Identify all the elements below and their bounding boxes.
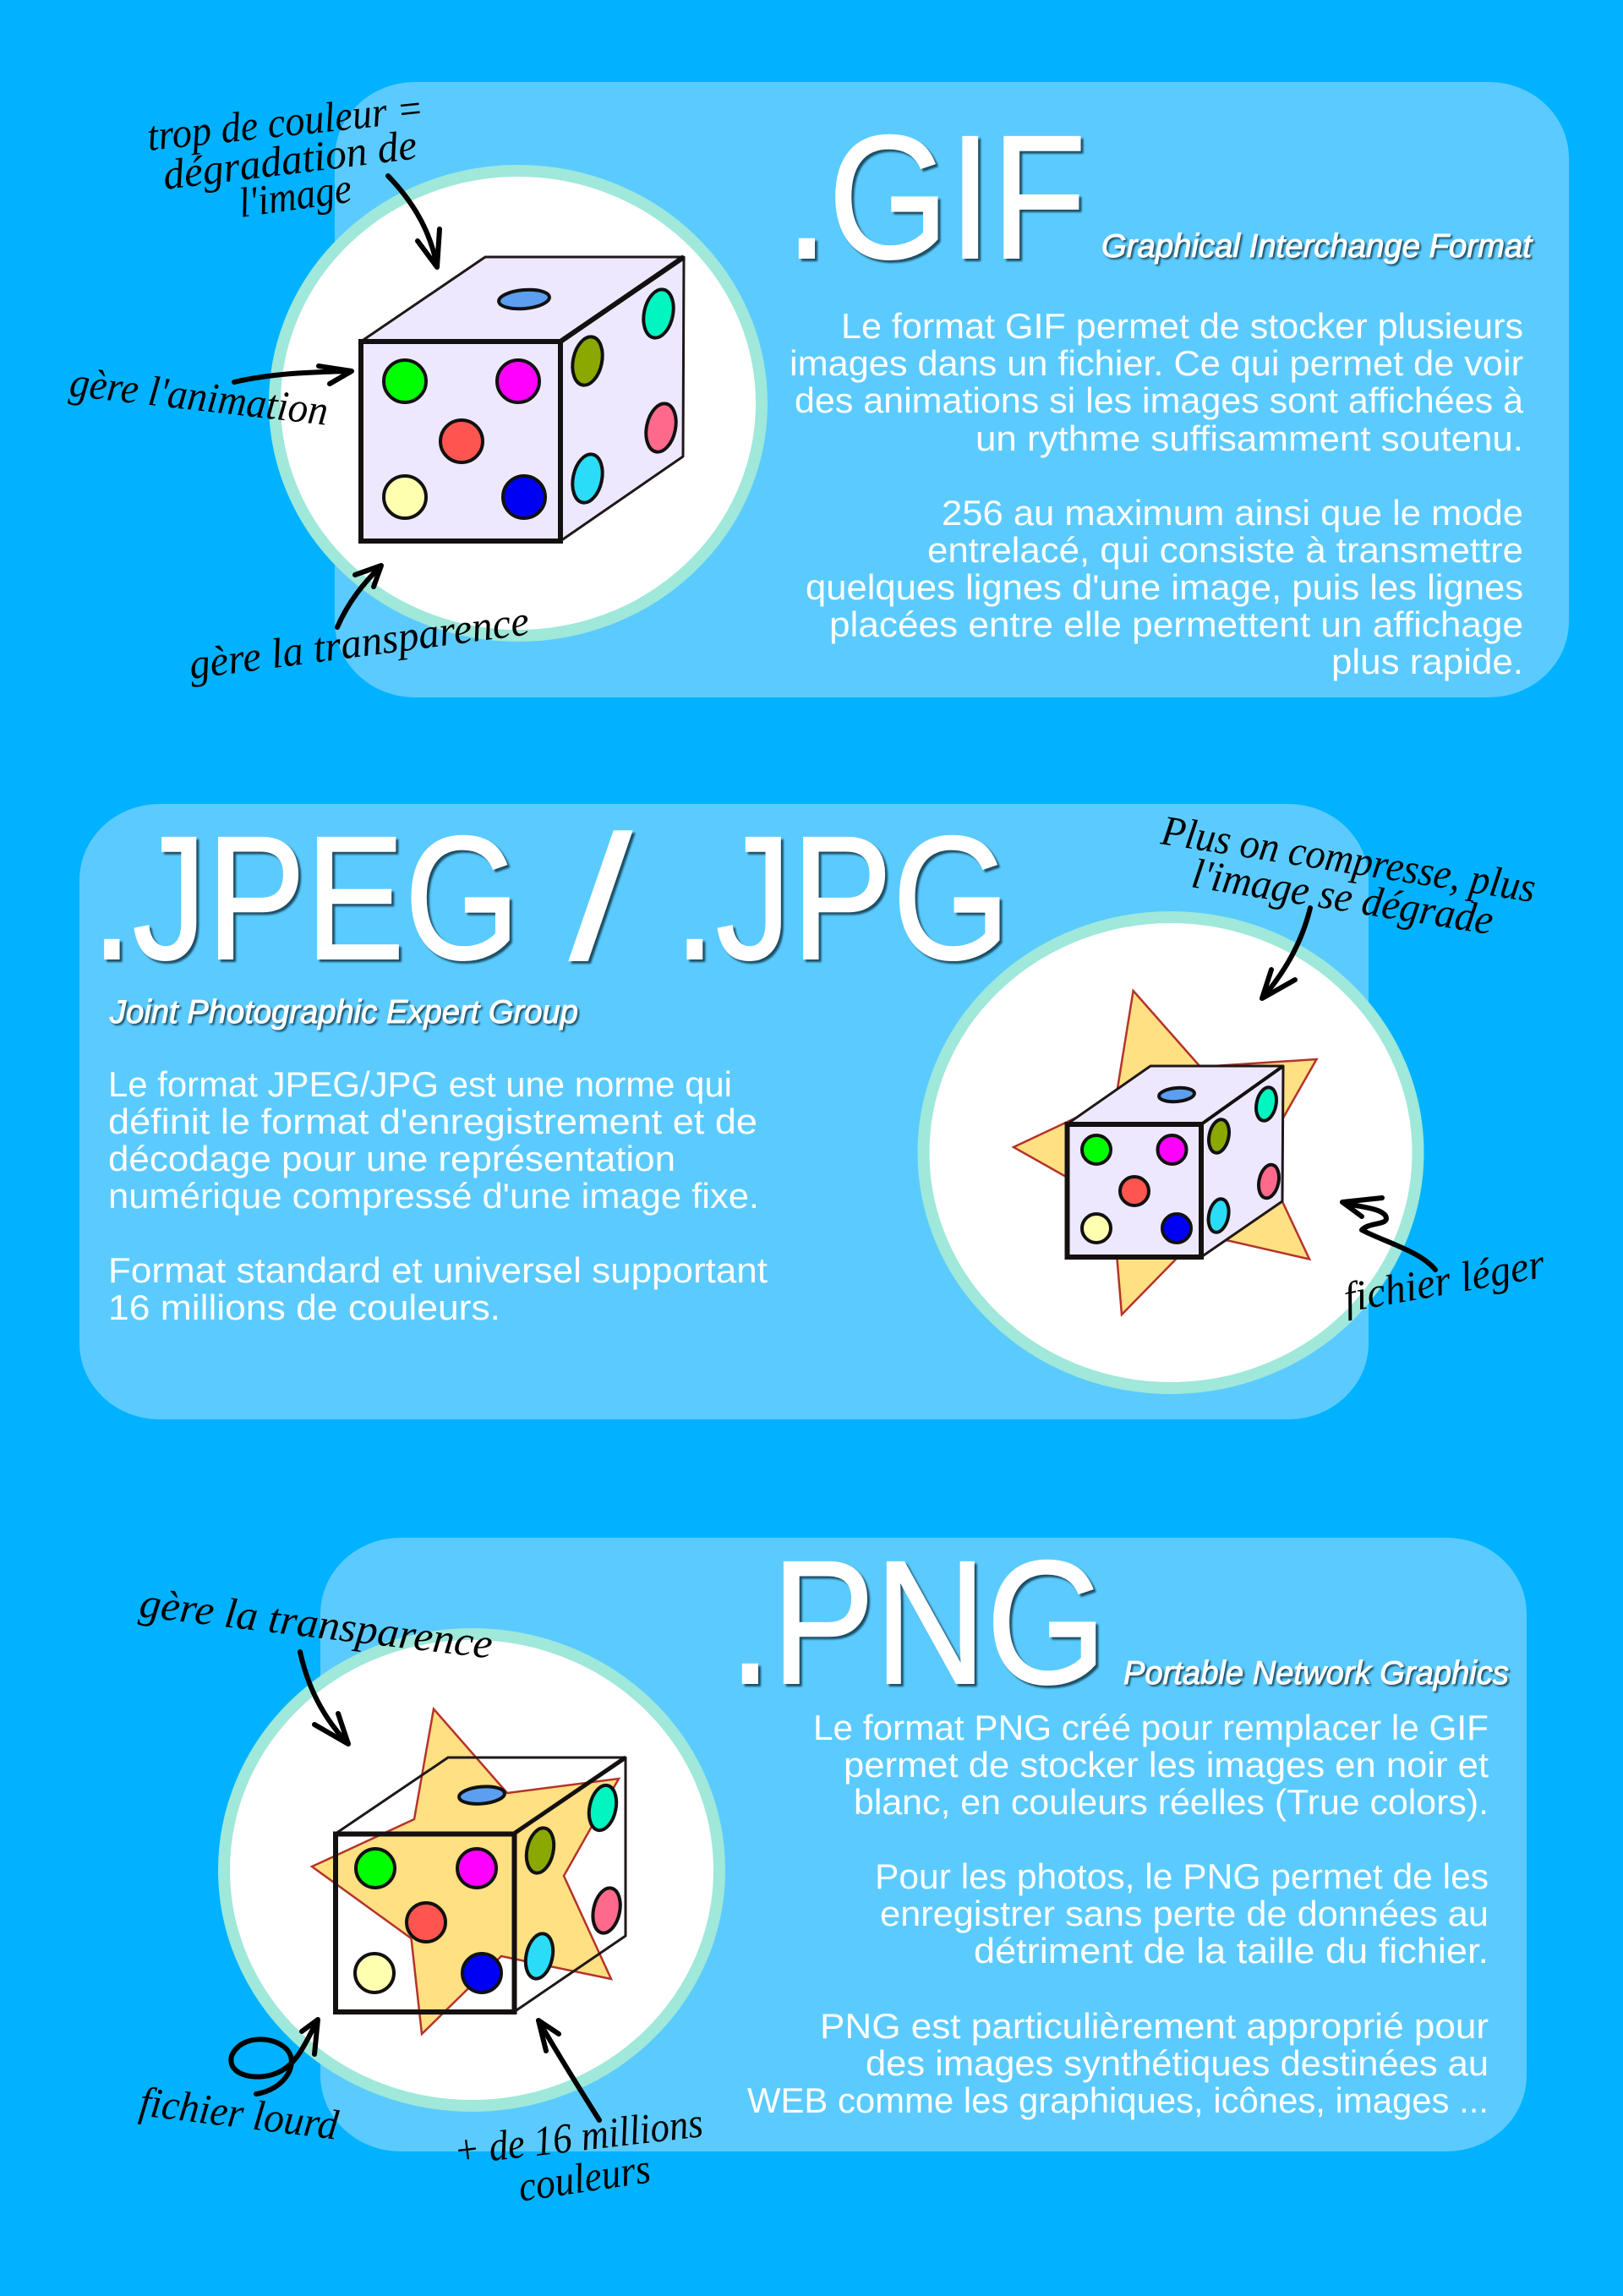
arrow: to transparent corner (337, 566, 381, 627)
callout: gère la transparence: gère la transparence (137, 1578, 495, 1668)
circle: GIF image (275, 171, 762, 636)
callout: fichier lourd: fichier lourd (137, 2077, 342, 2149)
text block: GIF description (790, 306, 1524, 681)
icon: PNG star and transparent dice (312, 1709, 626, 2034)
callout: trop de couleur: trop de couleur = (145, 84, 425, 160)
icon: GIF dice (361, 257, 684, 541)
callout: Plus on compresse: Plus on compresse, plus (1157, 806, 1539, 911)
callout: trop de couleur: l'image (236, 164, 354, 227)
text block: JPEG description: Format standard et universel supportant (108, 1250, 768, 1290)
arrow: squiggle to dice (1342, 1198, 1435, 1270)
text block: PNG description: Pour les photos, le PNG permet de les (875, 1856, 1489, 1896)
heading: .JPEG / .JPG: / (570, 801, 631, 997)
subtitle: Graphical Interchange Format: Graphical Interchange Format (1101, 228, 1533, 265)
text block: GIF description: 256 au maximum ainsi que le mode (942, 493, 1523, 533)
panel: PNG (137, 1525, 1527, 2211)
text block: PNG description: blanc, en couleurs réelles (True colors). (854, 1782, 1489, 1822)
heading: .JPEG / .JPG: .JPEG (91, 801, 520, 997)
arrow: to dice front (234, 366, 352, 384)
arrow: to dice corner (538, 2020, 599, 2120)
text block: JPEG description: décodage pour une représentation (108, 1139, 675, 1178)
text block: JPEG description (108, 1064, 768, 1327)
panel: GIF (68, 82, 1569, 697)
callout: 16 millions de couleurs: couleurs (515, 2145, 653, 2211)
panel: JPEG (79, 801, 1549, 1419)
heading: .GIF: .GIF (785, 100, 1086, 296)
arrow: to compressed dice (1262, 908, 1310, 998)
text block: JPEG description: numérique compressé d'une image fixe. (108, 1176, 759, 1216)
callout: Plus on compresse: l'image se dégrade (1189, 850, 1497, 943)
text block: PNG description: WEB comme les graphiques, icônes, images ... (747, 2080, 1489, 2120)
callout: 16 millions de couleurs (451, 2098, 705, 2211)
heading: .PNG: .PNG (729, 1525, 1107, 1721)
callout: trop de couleur (145, 84, 425, 227)
callout: trop de couleur: dégradation de (161, 121, 419, 199)
text block: PNG description: PNG est particulièrement approprié pour (820, 2006, 1489, 2046)
icon: JPEG star and dice (1014, 991, 1317, 1315)
callout: gère l'animation: gère l'animation (68, 358, 331, 435)
text block: PNG description: détriment de la taille du fichier. (974, 1931, 1489, 1971)
text block: PNG description (747, 1708, 1489, 2120)
subtitle: Joint Photographic Expert Group: Joint Photographic Expert Group (109, 994, 578, 1030)
text block: JPEG description: définit le format d'enregistrement et de (108, 1102, 757, 1141)
text block: JPEG description: 16 millions de couleurs. (108, 1287, 500, 1327)
circle: PNG image (224, 1634, 719, 2106)
text block: GIF description: un rythme suffisamment soutenu. (975, 418, 1523, 458)
text block: GIF description: plus rapide. (1331, 642, 1523, 681)
callout: fichier léger: fichier léger (1340, 1239, 1549, 1321)
arrow: to star (300, 1652, 348, 1744)
subtitle: Portable Network Graphics: Portable Network Graphics (1123, 1655, 1509, 1692)
arrow: loop to dice (231, 2020, 318, 2094)
text block: GIF description: quelques lignes d'une image, puis les lignes (806, 567, 1523, 607)
callout: 16 millions de couleurs: + de 16 millions (451, 2098, 705, 2174)
text block: PNG description: Le format PNG créé pour remplacer le GIF (813, 1708, 1489, 1747)
text block: PNG description: permet de stocker les images en noir et (844, 1745, 1489, 1785)
text block: PNG description: enregistrer sans perte de données au (880, 1894, 1489, 1933)
text block: GIF description: placées entre elle permettent un affichage (829, 604, 1523, 644)
text block: JPEG description: Le format JPEG/JPG est une norme qui (108, 1064, 732, 1104)
heading: .JPEG / .JPG (91, 801, 1010, 997)
text block: GIF description: des animations si les images sont affichées à (795, 380, 1524, 420)
text block: GIF description: images dans un fichier. Ce qui permet de voir (790, 343, 1523, 383)
heading: .JPEG / .JPG: .JPG (674, 801, 1010, 997)
circle: JPEG image (923, 917, 1418, 1388)
text block: GIF description: Le format GIF permet de stocker plusieurs (841, 306, 1523, 346)
text block: PNG description: des images synthétiques destinées au (866, 2043, 1489, 2083)
callout: gère la transparence: gère la transparence (186, 597, 532, 688)
text block: GIF description: entrelacé, qui consiste à transmettre (927, 530, 1523, 570)
arrow: to dice top (388, 176, 440, 267)
